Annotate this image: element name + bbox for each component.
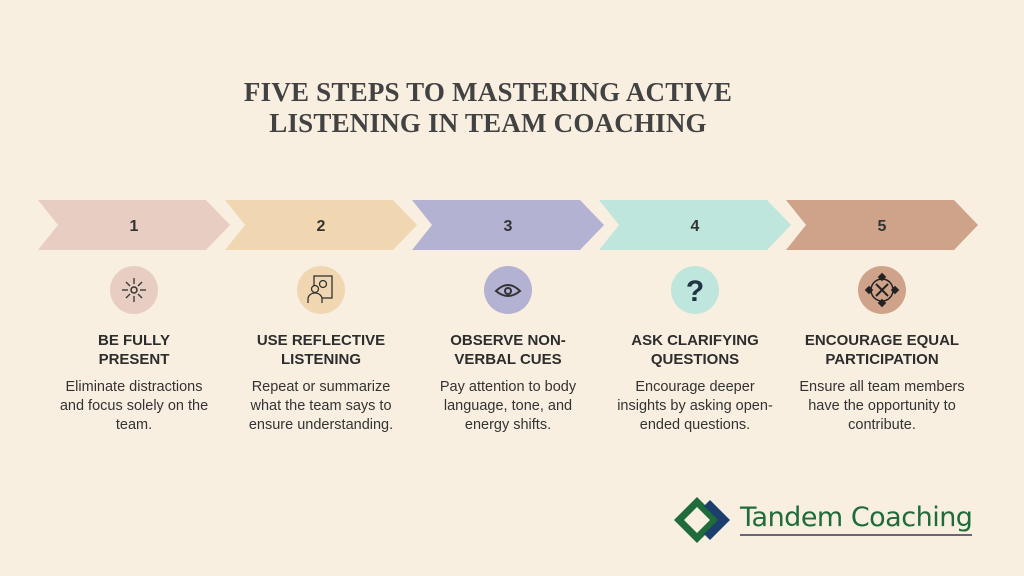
arrow 4: 4 (691, 218, 700, 235)
arrow 1 (38, 200, 230, 250)
step 4 text: insights by asking open- (617, 398, 773, 414)
arrow 2 (225, 200, 417, 250)
step 3 text (440, 332, 576, 433)
step 1 text: BE FULLY (98, 332, 170, 349)
step 2 text (249, 332, 393, 433)
step 4 text: ASK CLARIFYING (631, 332, 759, 349)
step 3 text: energy shifts. (465, 417, 551, 433)
step 2 text: USE REFLECTIVE (257, 332, 385, 349)
arrow 5 (786, 200, 978, 250)
icon 2: reflection (297, 266, 345, 314)
step 1 text: Eliminate distractions (66, 379, 202, 395)
step 5 text: have the opportunity to (808, 398, 956, 414)
step 1 text: and focus solely on the (60, 398, 208, 414)
icon 1: focus (110, 266, 158, 314)
step 5 text: contribute. (848, 417, 916, 433)
icon 4: question (671, 266, 719, 314)
step 2 text: ensure understanding. (249, 417, 393, 433)
step 4 text: Encourage deeper (635, 379, 755, 395)
logo text: Tandem Coaching (740, 502, 972, 533)
arrow 4 (599, 200, 791, 250)
step 2 text: Repeat or summarize (252, 379, 390, 395)
step 3 text: VERBAL CUES (454, 351, 562, 368)
step 1 text: team. (116, 417, 152, 433)
arrow 3: 3 (504, 218, 513, 235)
step 1 text (60, 332, 208, 433)
step 4 text: QUESTIONS (651, 351, 739, 368)
step 4 text (617, 332, 773, 433)
arrow 5: 5 (878, 218, 887, 235)
arrow 1: 1 (130, 218, 139, 235)
arrow 2: 2 (317, 218, 326, 235)
step 3 text: language, tone, and (444, 398, 572, 414)
step 5 text: Ensure all team members (799, 379, 965, 395)
step 2 text: LISTENING (281, 351, 361, 368)
title: FIVE STEPS TO MASTERING ACTIVE LISTENING IN TEAM COACHING (244, 77, 732, 138)
step 2 text: what the team says to (250, 398, 392, 414)
icon 3: eye (484, 266, 532, 314)
step 5 text: PARTICIPATION (825, 351, 939, 368)
step 1 text: PRESENT (99, 351, 169, 368)
step 5 text: ENCOURAGE EQUAL (805, 332, 959, 349)
step 3 text: Pay attention to body (440, 379, 576, 395)
step 3 text: OBSERVE NON- (450, 332, 566, 349)
icon 5: participation (858, 266, 906, 314)
step 4 text: ended questions. (640, 417, 750, 433)
arrow 3 (412, 200, 604, 250)
icon 4: question: ? (686, 275, 704, 308)
logo mark (674, 497, 730, 543)
step 5 text (799, 332, 965, 433)
